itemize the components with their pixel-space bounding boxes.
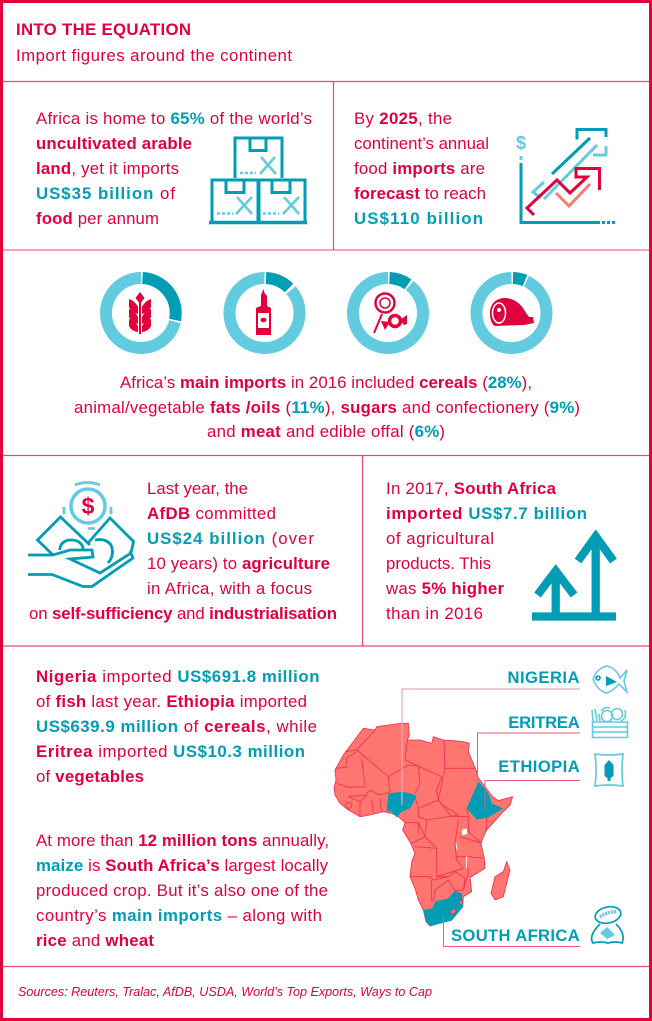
panel: forecast text: food imports are [354,159,485,178]
panel: forecast text [354,109,489,228]
panel: forecast text: By 2025, the [354,109,452,128]
panel: Nigeria text: of vegetables [36,767,144,786]
panel: Nigeria text: Eritrea imported US$10.3 million [36,742,305,761]
panel: forecast text: forecast to reach [354,184,486,203]
icon: cereal sack [595,754,623,786]
panel: uncultivated land text: food per annum [36,209,159,228]
panel: uncultivated land text: land, yet it imports [36,159,179,178]
panel: South Africa imports text: than in 2016 [386,604,483,623]
panel: AfDB text: on self-sufficiency and industrialisation [29,604,337,623]
label: Nigeria: NIGERIA [508,668,580,687]
panel: South Africa imports text: of agricultural [386,529,494,548]
icon: ham [490,298,534,326]
icon: money in hand: $ [82,493,95,519]
panel: South Africa imports text: products. This [386,554,491,573]
panel: uncultivated land text: US$35 billion of [36,184,175,203]
icon: lollipop and sweet [374,294,407,333]
panel: South Africa imports text [385,479,587,623]
panel: Nigeria text: US$639.9 million of cereals, while [36,717,317,736]
text: main imports: animal/vegetable fats /oils (11%), sugars and confectionery (9%) [74,398,580,417]
icon: grain bag [592,904,623,943]
icon: money in hand [28,482,134,586]
text: main imports [74,373,580,441]
panel: uncultivated land text: Africa is home to 65% of the world’s [36,109,312,128]
map: highlighted South Africa [423,891,463,926]
label: Ethiopia: ETHIOPIA [498,757,580,776]
panel: AfDB text: AfDB committed [147,504,276,523]
panel: maize text: rice and wheat [36,931,154,950]
panel: Nigeria text [36,667,320,786]
panel: maize text [36,831,329,950]
chart: sugars donut [353,277,423,348]
label: Eritrea: ERITREA [508,713,580,732]
panel: AfDB text [29,479,337,623]
panel: AfDB text: 10 years) to agriculture [147,554,330,573]
title: INTO THE EQUATION [16,20,191,39]
panel: uncultivated land text [36,109,312,228]
icon: vegetable crate [592,707,628,738]
panel: maize text: produced crop. But it’s also one of the [36,881,328,900]
panel: Nigeria text: Nigeria imported US$691.8 million [36,667,320,686]
panel: forecast text: continent’s annual [354,134,489,153]
panel: uncultivated land text: uncultivated arable [36,134,192,153]
panel: South Africa imports text: was 5% higher [385,579,504,598]
icon: fish [593,666,627,693]
chart: fats and oils donut [230,277,300,348]
panel: AfDB text: Last year, the [147,479,248,498]
map: highlighted Ethiopia and Eritrea [467,782,503,819]
title [16,20,292,65]
map: highlighted Nigeria [387,792,417,817]
panel: maize text: At more than 12 million tons annually, [36,831,329,850]
panel: AfDB text: US$24 billion (over [147,529,314,548]
label: South Africa: SOUTH AFRICA [451,926,580,945]
icon: wheat [129,292,151,334]
panel: Nigeria text: of fish last year. Ethiopia imported [36,692,307,711]
icon: up arrows [532,536,616,616]
icon: food boxes [209,138,307,222]
chart: meat donut [476,277,546,348]
panel: maize text: maize is South Africa’s largest locally [36,856,329,875]
title: Import figures around the continent [16,46,292,65]
text: main imports: Africa’s main imports in 2016 included cereals (28%), [120,373,532,392]
icon: rising chart: $ [516,133,526,153]
panel: maize text: country’s main imports – along with [36,906,322,925]
chart: cereals donut [106,277,177,348]
panel: South Africa imports text: In 2017, South Africa [386,479,557,498]
panel: AfDB text: in Africa, with a focus [147,579,312,598]
leader lines [402,689,580,946]
panel: South Africa imports text: imported US$7.7 billion [386,504,587,523]
map: Africa [334,723,513,926]
icon: rising chart [516,130,617,222]
icon: sauce bottle [256,289,271,335]
text: main imports: and meat and edible offal (6%) [207,422,445,441]
sources: Sources: Reuters, Tralac, AfDB, USDA, World’s Top Exports, Ways to Cap [18,985,432,999]
panel: forecast text: US$110 billion [354,209,483,228]
